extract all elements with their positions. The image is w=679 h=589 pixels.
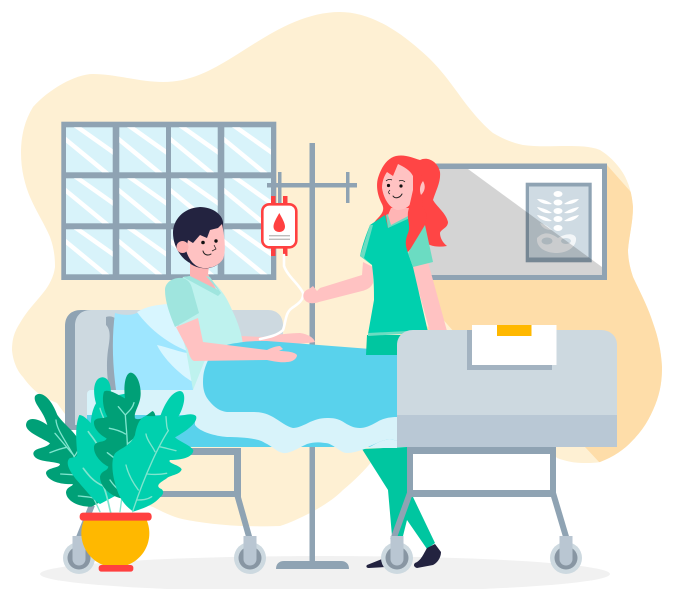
mattress [87,390,397,447]
blanket lower edge over nurse legs [330,440,397,452]
patient gown [172,276,243,390]
IV pole [267,143,357,569]
floor shadow [40,556,610,589]
patient head [173,207,225,268]
nurse hair front lock [406,170,426,252]
leaf: right mid green [112,391,196,512]
nurse ear [420,181,425,195]
nurse right arm [412,262,447,332]
bed frame: head end [78,448,250,540]
nurse shoes [366,544,441,568]
leaf: left mid green [68,415,120,513]
nurse hair back [368,155,448,252]
blanket underlayer [193,351,397,453]
patient [165,207,243,390]
patient sleeve [165,278,199,327]
wheels: foot end [381,536,582,574]
bed frame: foot end [393,447,567,540]
leaf: rear dark [94,373,156,512]
nurse [303,155,448,568]
wheels: head end [63,536,266,574]
x-ray film [526,183,592,262]
pillow [113,304,193,390]
nurse face [382,164,413,210]
x-ray light box [425,164,607,280]
nurse neck [388,208,410,225]
nurse features [386,179,405,198]
blanket top [203,341,397,428]
nurse trousers [366,335,428,355]
pot [80,513,152,572]
bed footboard [397,325,617,447]
icon: blood drop [274,213,285,232]
nurse scrub top [360,215,428,334]
patient near arm [176,318,297,362]
window [61,122,276,280]
blanket [193,341,397,453]
potted plant [26,373,196,572]
patient far arm [240,333,315,345]
IV tube [260,255,303,339]
nurse hem [368,330,428,336]
nurse left arm reaching [303,262,373,303]
nurse sleeve [408,225,433,267]
leaf: far left dark [26,394,117,512]
blood bag [262,196,296,256]
headboard [65,310,283,430]
patient neck [190,258,218,293]
leaf: rear mid green [91,377,130,493]
nurse legs [362,447,435,549]
clipboard [467,325,556,370]
